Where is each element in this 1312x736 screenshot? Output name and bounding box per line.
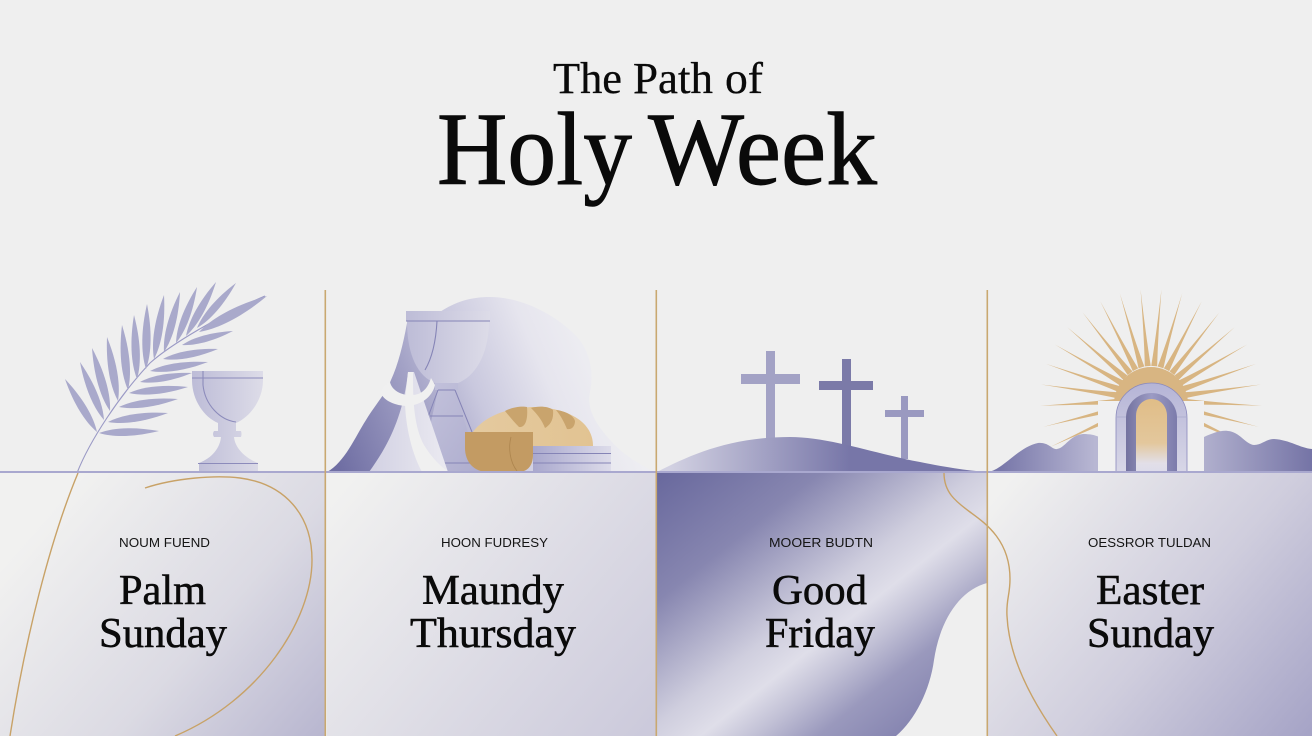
- tomb walls: [1098, 401, 1204, 472]
- title line: Holy Week: Week: [648, 92, 877, 207]
- title line: The Path of: of: [725, 54, 763, 103]
- heading: Maundy Thursday: Maundy: [422, 568, 564, 614]
- cross: centre: [819, 359, 873, 446]
- cut bread: [465, 432, 533, 472]
- tomb outer arch: [1116, 383, 1187, 472]
- heading: Good Friday: Good: [772, 568, 867, 614]
- horizon line: [0, 471, 1312, 473]
- heading: Palm Sunday: Palm: [119, 568, 206, 614]
- bread score marks: [505, 407, 575, 429]
- cross: left: [741, 351, 800, 440]
- bread loaf: [472, 407, 593, 446]
- vertical divider: first: [324, 290, 326, 736]
- heading: Good Friday: Friday: [765, 611, 875, 657]
- label: Maundy Thursday kicker: HOON FUDRESY: [441, 536, 549, 550]
- icon: palm branch: [62, 280, 269, 473]
- gold curve: left: [10, 473, 78, 736]
- title: [437, 54, 877, 207]
- title line: The Path of: The: [553, 54, 622, 103]
- panel: Maundy Thursday card: [327, 473, 656, 736]
- white scarf: [381, 372, 449, 472]
- heading: Easter Sunday: Sunday: [1087, 611, 1214, 657]
- illustration: Maundy Thursday scene: [327, 297, 654, 472]
- title line: The Path of: Path: [633, 54, 713, 103]
- heading: Easter Sunday: Easter: [1096, 568, 1204, 614]
- large chalice stem: [420, 383, 480, 472]
- gold curve: right loop: [145, 477, 312, 736]
- illustration: three crosses on a hill: [657, 351, 990, 472]
- cloth cone: [369, 372, 448, 472]
- dome backdrop: [327, 297, 654, 472]
- gold curve: crossing Good Friday and Easter: [944, 473, 1057, 736]
- large chalice bowl: [406, 311, 490, 383]
- sun rays: [1040, 289, 1262, 450]
- vertical divider: second: [656, 290, 657, 736]
- label: Good Friday kicker: MOOER BUDTN: [769, 536, 873, 550]
- title line: Holy Week: Holy: [437, 92, 632, 207]
- heading: Maundy Thursday: Thursday: [410, 611, 576, 657]
- left hills: [988, 434, 1099, 472]
- right hills: [1204, 431, 1312, 472]
- hill: [657, 437, 990, 472]
- stacked plates: [533, 446, 611, 472]
- heading: Palm Sunday: Sunday: [99, 611, 227, 657]
- label: Palm Sunday kicker: NOUM FUEND: [119, 536, 210, 550]
- glowing doorway: [1136, 399, 1167, 472]
- panel: Palm Sunday card: [0, 473, 325, 736]
- panel: Easter Sunday card: [988, 473, 1312, 736]
- label: Easter Sunday kicker: OESSROR TULDAN: [1088, 536, 1211, 550]
- icon: small chalice: [192, 371, 263, 472]
- panel: Good Friday card: [657, 473, 987, 736]
- vertical divider: third: [986, 290, 988, 736]
- cross: right: [885, 396, 924, 459]
- tomb inner arch: [1126, 393, 1177, 472]
- illustration: sunrise and empty tomb: [988, 289, 1312, 472]
